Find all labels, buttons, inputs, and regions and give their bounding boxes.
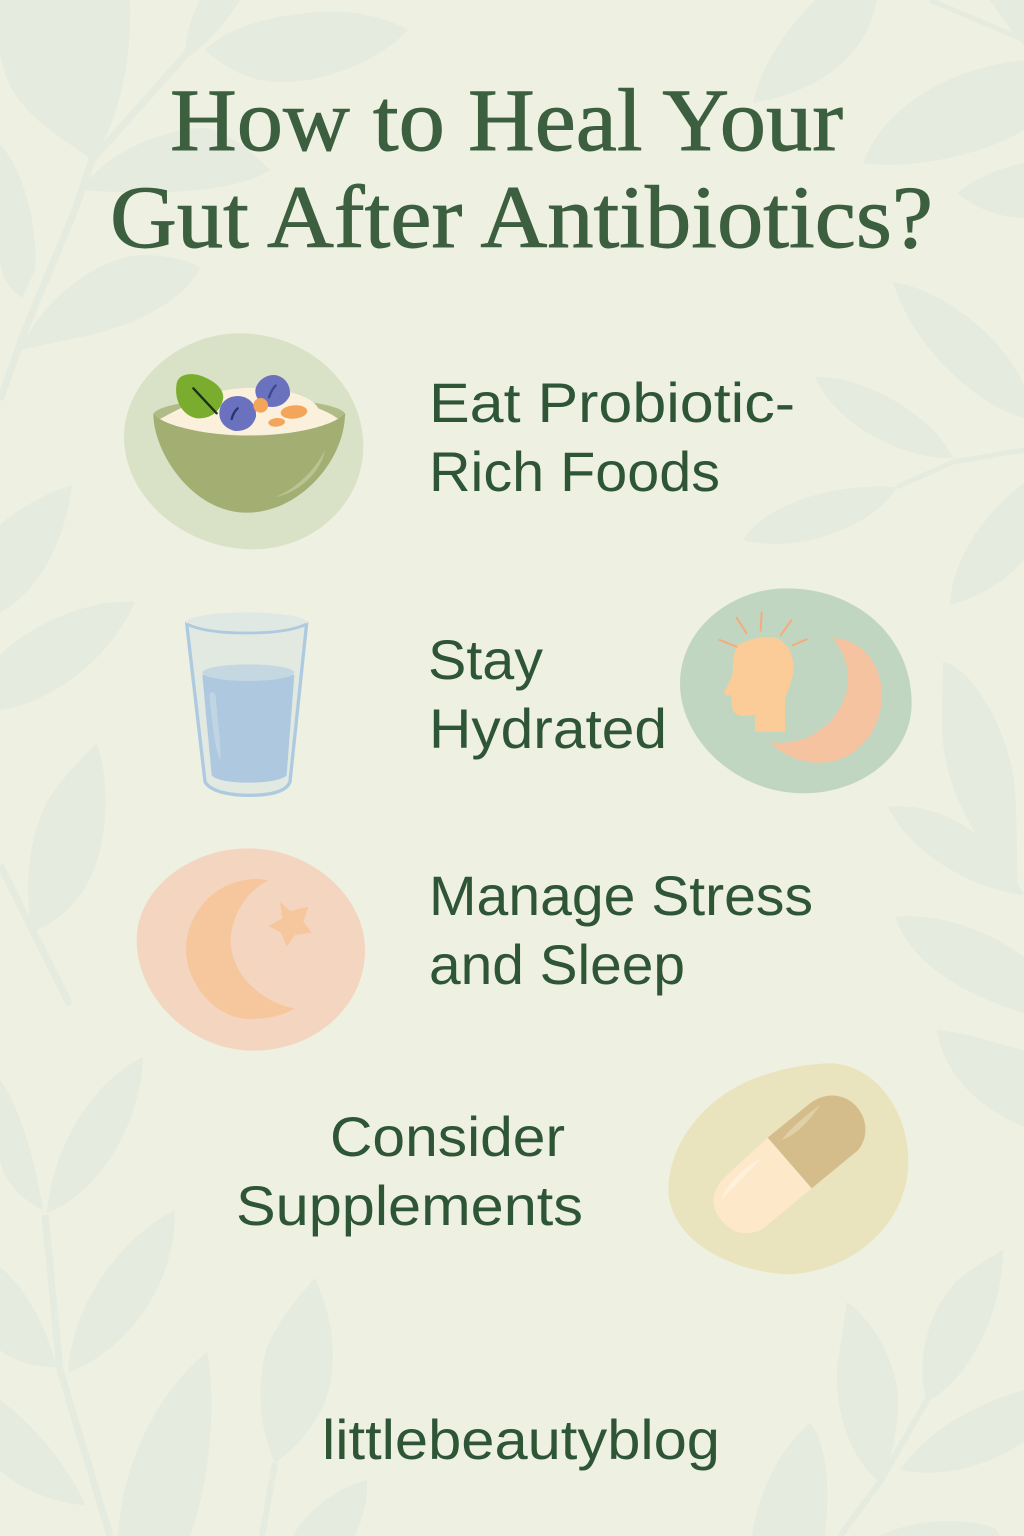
almonds bbox=[253, 398, 308, 427]
bowl highlight bbox=[275, 450, 325, 497]
label: eat probiotic-rich foods bbox=[429, 371, 795, 503]
capsule cream half bbox=[713, 1138, 812, 1233]
star bbox=[268, 902, 312, 947]
head silhouette bbox=[724, 637, 793, 732]
title bbox=[110, 72, 933, 267]
capsule highlight bbox=[782, 1105, 820, 1140]
water highlight bbox=[209, 692, 221, 760]
label: stay hydrated: Stay bbox=[428, 628, 543, 691]
head icon blob bbox=[680, 588, 912, 793]
moon icon blob bbox=[137, 848, 365, 1051]
bowl background blob bbox=[124, 333, 363, 549]
water surface bbox=[202, 664, 294, 681]
icon: capsule supplement bbox=[668, 1063, 908, 1274]
thought rays bbox=[719, 612, 807, 647]
label: eat probiotic-rich foods: Eat Probiotic- bbox=[429, 371, 795, 434]
title: How to Heal Your bbox=[170, 72, 843, 170]
capsule blob bbox=[668, 1063, 908, 1274]
yogurt bbox=[160, 388, 338, 435]
crescent moon bbox=[770, 638, 882, 763]
label: stay hydrated: Hydrated bbox=[429, 697, 667, 760]
spinach leaf bbox=[176, 374, 223, 418]
footer brand: littlebeautyblog bbox=[322, 1408, 720, 1471]
icon: probiotic bowl bbox=[124, 333, 363, 549]
bowl back rim bbox=[153, 398, 345, 432]
crescent bbox=[186, 879, 294, 1019]
blueberry left bbox=[219, 396, 256, 431]
title: Gut After Antibiotics? bbox=[110, 169, 933, 267]
icon: moon and star bbox=[137, 848, 365, 1051]
label: eat probiotic-rich foods: Rich Foods bbox=[429, 440, 720, 503]
glass body bbox=[187, 623, 307, 795]
label: consider supplements: Consider bbox=[330, 1105, 565, 1168]
label: manage stress and sleep bbox=[429, 864, 813, 996]
icon: glass of water bbox=[186, 612, 307, 795]
blueberry right bbox=[255, 375, 290, 407]
capsule brown half bbox=[768, 1095, 865, 1188]
icon: head and moon bbox=[680, 588, 912, 793]
water bbox=[202, 675, 294, 783]
label: stay hydrated bbox=[428, 628, 667, 760]
label: manage stress and sleep: Manage Stress bbox=[429, 864, 813, 927]
bowl body bbox=[153, 413, 345, 513]
glass rim bbox=[186, 612, 307, 633]
label: consider supplements bbox=[236, 1105, 583, 1237]
label: manage stress and sleep: and Sleep bbox=[429, 933, 685, 996]
label: consider supplements: Supplements bbox=[236, 1174, 583, 1237]
